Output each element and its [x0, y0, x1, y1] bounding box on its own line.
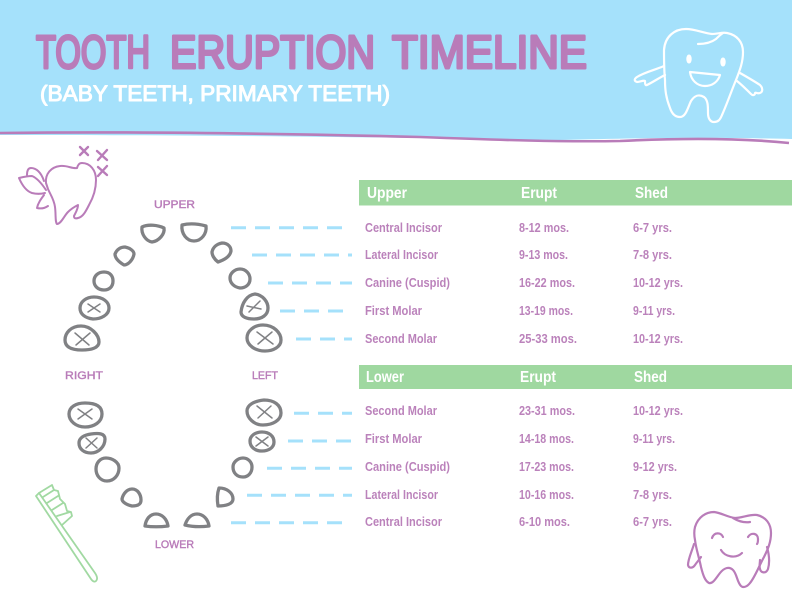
- row: upper central incisor: [365, 221, 672, 235]
- upper arch teeth: [65, 224, 281, 351]
- row: lower central incisor: Central Incisor: [365, 515, 442, 529]
- row: upper central incisor: Central Incisor: [365, 221, 442, 235]
- row: lower canine: Canine (Cuspid): [365, 460, 450, 474]
- icon: waving tooth mascot: [635, 29, 762, 122]
- upper table header: [359, 180, 792, 206]
- row: lower second molar: Second Molar: [365, 404, 437, 418]
- lower table header: Shed: [634, 369, 667, 386]
- panel: upper table: [359, 180, 792, 346]
- row: upper first molar: [365, 304, 675, 318]
- tooth: lower right central incisor: [145, 514, 168, 527]
- row: upper first molar: 9-11 yrs.: [633, 304, 675, 318]
- row: lower lateral incisor: 7-8 yrs.: [633, 488, 672, 502]
- tooth: upper left first molar: [241, 294, 268, 319]
- row: upper lateral incisor: 9-13 mos.: [519, 248, 568, 262]
- icon: smiling tooth: [688, 512, 771, 587]
- row: lower canine: 17-23 mos.: [519, 460, 574, 474]
- row: lower second molar: 23-31 mos.: [519, 404, 575, 418]
- tooth: upper right lateral incisor: [115, 247, 134, 265]
- row: lower lateral incisor: [365, 488, 672, 502]
- tooth: lower right first molar: [79, 434, 105, 453]
- row: lower first molar: [365, 432, 675, 446]
- header banner: [0, 0, 792, 143]
- row: upper canine: Canine (Cuspid): [365, 276, 450, 290]
- row: upper canine: [365, 276, 683, 290]
- row: lower second molar: [365, 404, 683, 418]
- tooth: lower right second molar: [69, 403, 102, 427]
- tooth: upper left lateral incisor: [212, 243, 231, 262]
- row: lower second molar: 10-12 yrs.: [633, 404, 683, 418]
- tooth: upper left canine: [230, 269, 250, 288]
- row: upper central incisor: 8-12 mos.: [519, 221, 569, 235]
- row: upper lateral incisor: 7-8 yrs.: [633, 248, 672, 262]
- tooth: lower left canine: [233, 458, 252, 477]
- row: upper canine: 16-22 mos.: [519, 276, 575, 290]
- row: lower first molar: First Molar: [365, 432, 422, 446]
- title: ERUPTION: [170, 26, 375, 78]
- lower table header: Lower: [366, 369, 404, 386]
- row: lower central incisor: 6-10 mos.: [519, 515, 570, 529]
- row: upper second molar: 10-12 yrs.: [633, 332, 683, 346]
- row: lower canine: [365, 460, 677, 474]
- row: upper second molar: [365, 332, 683, 346]
- row: upper lateral incisor: Lateral Incisor: [365, 248, 438, 262]
- upper table header: Upper: [367, 185, 407, 202]
- row: upper central incisor: 6-7 yrs.: [633, 221, 672, 235]
- tooth: upper right second molar: [65, 326, 99, 350]
- row: lower lateral incisor: 10-16 mos.: [519, 488, 574, 502]
- row: lower first molar: 9-11 yrs.: [633, 432, 675, 446]
- label: upper: UPPER: [154, 199, 195, 211]
- tooth: lower left central incisor: [185, 514, 209, 527]
- row: lower central incisor: 6-7 yrs.: [633, 515, 672, 529]
- lower table header: Erupt: [520, 369, 557, 386]
- tooth: upper right first molar: [80, 297, 109, 319]
- tooth: lower right lateral incisor: [122, 489, 141, 506]
- icon: toothbrush: [36, 485, 97, 582]
- panel: lower table: [359, 365, 792, 529]
- title: [36, 26, 587, 78]
- label: right: RIGHT: [65, 370, 103, 382]
- lower arch teeth: [69, 400, 281, 527]
- row: upper second molar: 25-33 mos.: [519, 332, 577, 346]
- tooth: upper right canine: [94, 272, 113, 290]
- upper table header: Shed: [635, 185, 668, 202]
- tooth: lower left second molar: [247, 400, 281, 425]
- row: upper first molar: First Molar: [365, 304, 422, 318]
- title: TOOTH: [36, 26, 150, 78]
- row: upper lateral incisor: [365, 248, 672, 262]
- row: upper second molar: Second Molar: [365, 332, 437, 346]
- tooth: lower left lateral incisor: [217, 488, 233, 506]
- label: left: LEFT: [252, 370, 278, 382]
- lower table header: [359, 365, 792, 389]
- icon: sparkling tooth with leaves: [19, 147, 107, 224]
- row: lower canine: 9-12 yrs.: [633, 460, 677, 474]
- tooth: upper right central incisor: [142, 225, 164, 242]
- tooth: lower right canine: [96, 458, 119, 481]
- title: TIMELINE: [392, 26, 587, 78]
- tooth: upper left central incisor: [182, 224, 206, 241]
- tooth: upper left second molar: [247, 325, 281, 351]
- upper table header: Erupt: [521, 185, 558, 202]
- row: lower central incisor: [365, 515, 672, 529]
- row: upper first molar: 13-19 mos.: [519, 304, 573, 318]
- row: lower first molar: 14-18 mos.: [519, 432, 574, 446]
- row: upper canine: 10-12 yrs.: [633, 276, 683, 290]
- subtitle: (BABY TEETH, PRIMARY TEETH): [40, 81, 390, 106]
- row: lower lateral incisor: Lateral Incisor: [365, 488, 438, 502]
- label: lower: LOWER: [155, 539, 194, 551]
- dashed leader lines: [231, 228, 352, 523]
- tooth: lower left first molar: [250, 432, 274, 451]
